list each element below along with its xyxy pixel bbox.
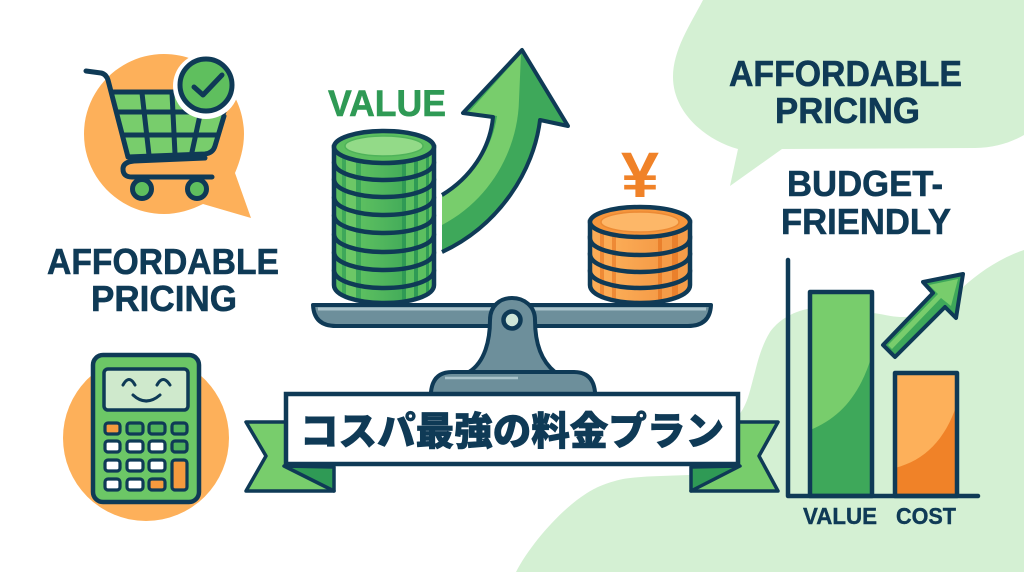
heading: budget-friendly: FRIENDLY [781,201,951,242]
orange speech bubble [84,54,251,218]
heading: budget-friendly: BUDGET- [787,163,943,204]
coin top face [334,131,434,163]
calculator screen [104,369,188,410]
calculator buttons [105,423,187,490]
heading: left affordable pricing: AFFORDABLE [47,241,279,282]
scale stand [313,298,711,398]
cost bar [895,373,957,496]
chart axes [788,260,978,496]
ribbon: left tail [246,422,334,491]
banner: title [286,394,738,464]
scale base [431,372,595,398]
pivot pin [504,312,520,328]
label: cost: COST [896,503,956,529]
check badge [173,53,239,119]
scale pivot [469,298,555,372]
value bar [810,292,872,496]
orange circle [63,355,229,521]
heading: top right affordable pricing [729,53,962,131]
label: value: VALUE [803,503,877,529]
heading: top right affordable pricing: PRICING [775,90,920,131]
cart frame [86,71,224,177]
heading: budget-friendly [781,163,951,242]
label: value: VALUE [328,83,446,124]
icon: smiling calculator [63,355,229,521]
heading: left affordable pricing [47,241,279,319]
cart basket [113,92,226,157]
coin layers [334,147,434,303]
title text: コスパ最強の料金プラン [300,401,724,457]
chart: value vs cost bars [788,260,978,529]
chart: orange coin stack [590,207,690,303]
cart wheels [132,180,206,198]
heading: top right affordable pricing: AFFORDABLE [729,53,962,94]
chart: green coin stack [334,131,434,303]
coin top face [590,207,690,237]
panel: bottom right background blob [516,250,1024,572]
icon: shopping cart in speech bubble [84,53,251,218]
coin layers [590,222,690,303]
scale beam [313,305,711,326]
panel: top right speech bubble [673,0,1024,186]
heading: left affordable pricing: PRICING [91,278,237,319]
smiling face [123,380,170,401]
symbol: yen sign: ¥ [621,139,659,211]
ribbon: right tail [691,422,778,491]
calculator body [93,355,199,502]
arrow: rising green arrow [442,50,568,252]
arrow: chart trend [883,274,963,357]
